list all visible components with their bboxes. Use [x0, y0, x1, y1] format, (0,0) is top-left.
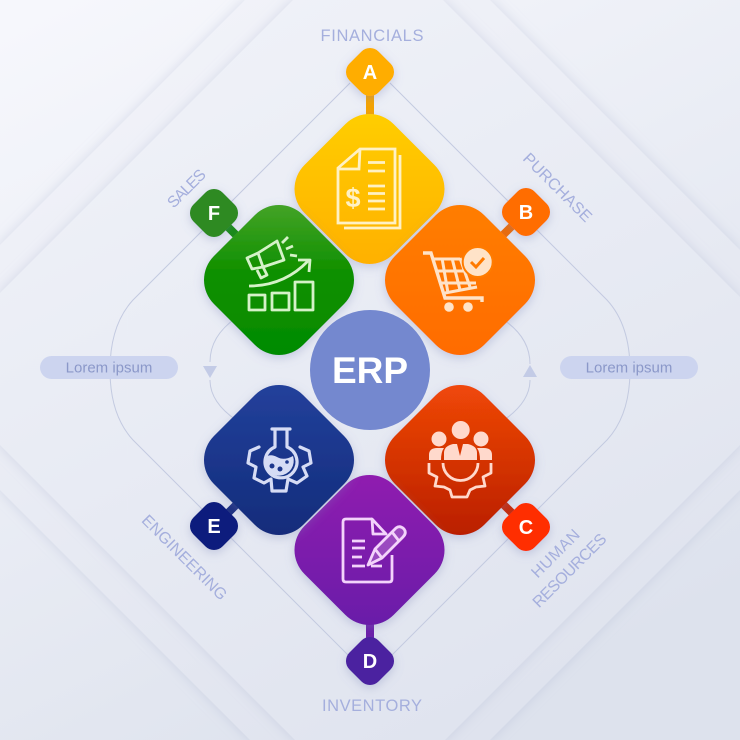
label: inventory: INVENTORY [322, 697, 422, 715]
label: purchase: PURCHASE [519, 150, 595, 226]
connectors [228, 90, 512, 645]
icon: megaphone and growth chart [247, 237, 313, 310]
pill: left lorem ipsum [40, 356, 178, 379]
connecting outline paths [110, 83, 630, 657]
icon: financial document [338, 149, 400, 228]
badge: d [341, 632, 399, 690]
icon: shopping cart [423, 247, 493, 312]
badge: c: C [519, 517, 533, 539]
badge: d: D [363, 651, 377, 673]
arrow: left loop [203, 366, 217, 378]
panel: d inventory [280, 461, 459, 639]
badge: e [185, 497, 243, 555]
panel: f sales [190, 191, 368, 369]
badge: e: E [207, 516, 221, 538]
badge: f [185, 184, 243, 242]
panel: e engineering [190, 371, 368, 549]
badge: b: B [519, 202, 533, 224]
badge: f: F [208, 203, 220, 225]
label: financials: FINANCIALS [320, 27, 424, 45]
label: sales: SALES [164, 166, 210, 212]
pill: left lorem ipsum: Lorem ipsum [66, 360, 152, 376]
pill: right lorem ipsum [560, 356, 698, 379]
panel: a financials [280, 100, 459, 278]
arrow: right loop [523, 365, 537, 377]
pill: right lorem ipsum: Lorem ipsum [586, 360, 672, 376]
label: engineering: ENGINEERING [138, 512, 230, 604]
icon: financial document: $ [345, 183, 361, 213]
icon: team and gear [429, 421, 492, 497]
panel: c human resources [371, 371, 549, 549]
badge: c [497, 498, 555, 556]
icon: form and pencil [343, 519, 405, 582]
label: human resources: HUMAN [528, 526, 584, 582]
panel: b purchase [371, 191, 549, 369]
badge: b [497, 183, 555, 241]
label: human resources: RESOURCES [530, 531, 610, 611]
badge: a: A [363, 62, 377, 84]
center circle: erp: ERP [332, 350, 408, 391]
center circle: erp [310, 310, 430, 430]
badge: a [341, 43, 399, 101]
icon: flask in gear [248, 429, 311, 491]
